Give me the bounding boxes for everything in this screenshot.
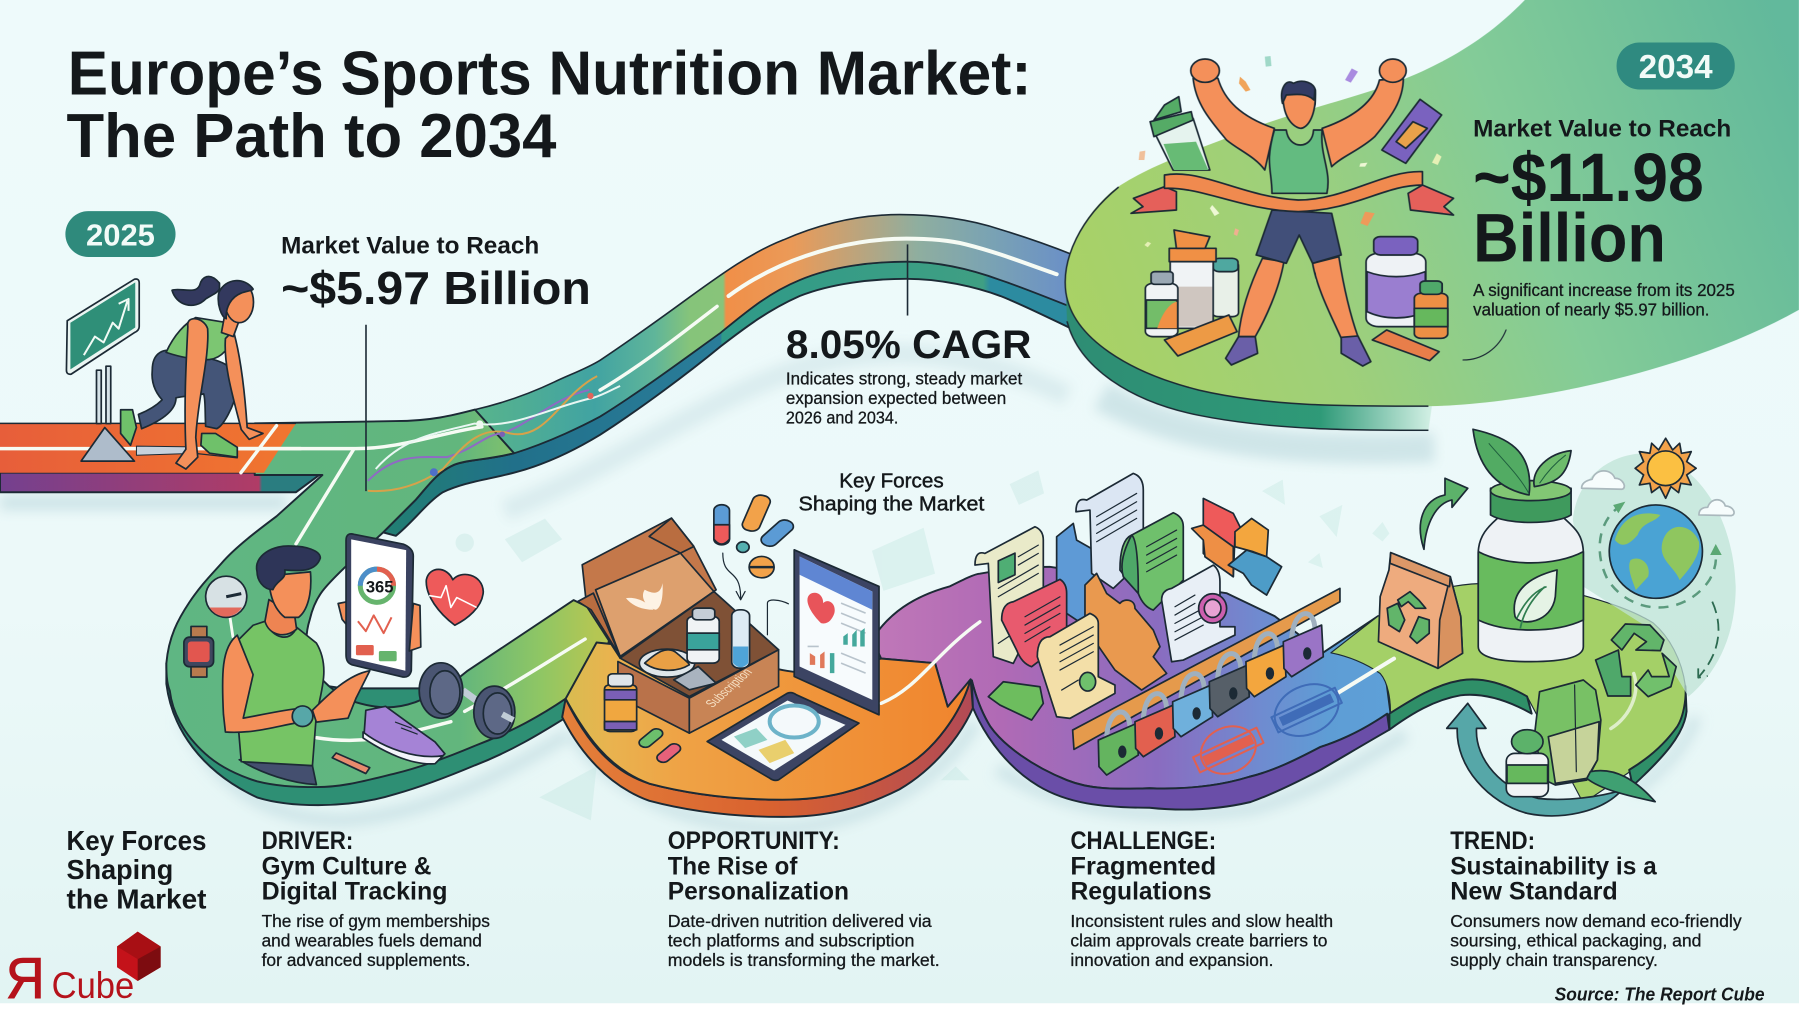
surface: driver loop: [166, 410, 614, 787]
smart watch: [184, 626, 214, 677]
running shoe: [363, 706, 445, 764]
callout: CAGR: Indicates strong, steady market: [786, 368, 1022, 388]
icon: victorious athlete with supplements: [1131, 56, 1506, 366]
badge: 2034: [1617, 42, 1735, 90]
small green jar: [1506, 730, 1548, 797]
icon: growth sign: [66, 279, 139, 424]
head: [1283, 90, 1315, 128]
sun: [1635, 438, 1696, 498]
finish ribbon: [1131, 172, 1453, 215]
red stamp: [1187, 715, 1270, 785]
arms raised: [1193, 78, 1274, 170]
callout: CAGR: 8.05% CAGR: [786, 322, 1031, 367]
text block: challenge: [1070, 827, 1333, 970]
heading: key forces: the Market: [67, 884, 207, 915]
confetti: [1139, 56, 1442, 247]
certificate document: [975, 527, 1043, 663]
edge: starting straight top: [0, 422, 296, 424]
open lid: [582, 518, 716, 658]
green document: [1120, 513, 1183, 610]
heart: [426, 569, 483, 625]
heading: key forces: Key Forces: [67, 825, 207, 856]
text block: opportunity: [668, 827, 940, 970]
rim: trend inner: [1389, 679, 1532, 730]
top-right jigsaw cluster: [1192, 498, 1282, 595]
surface: opportunity section: [566, 643, 971, 800]
panel: 2034 destination platform: [1065, 0, 1799, 430]
surface: upper ribbon: [475, 215, 1073, 453]
pills: [637, 494, 797, 764]
callout: 2034 market value: Market Value to Reach: [1473, 116, 1731, 143]
text block: driver: The rise of gym memberships: [262, 911, 490, 931]
source credit: Source: The Report Cube: [1555, 983, 1765, 1004]
phone reading: 365: [366, 577, 394, 596]
text block: challenge: innovation and expansion.: [1070, 950, 1274, 970]
blue-grey document: [1076, 473, 1143, 588]
recycling symbol: [1596, 624, 1676, 697]
callout: 2025 market value: ~$5.97 Billion: [281, 262, 591, 314]
text block: opportunity: Personalization: [668, 878, 849, 906]
text block: driver: Gym Culture &: [262, 852, 431, 880]
dumbbell: [419, 663, 515, 738]
green halo: [1573, 453, 1736, 697]
heading: key forces: Shaping: [67, 854, 173, 885]
lane markings: [0, 239, 1636, 740]
tank top: [1269, 130, 1328, 193]
callout: 2034 market value: ~$11.98: [1473, 139, 1704, 216]
shorts: [1256, 210, 1341, 263]
earth: [1609, 505, 1702, 598]
legs: [1239, 258, 1284, 337]
shaker bottle: [1150, 97, 1210, 170]
heading: key forces centre: Key Forces: [839, 470, 944, 493]
text block: opportunity: models is transforming the market.: [668, 950, 940, 970]
text block: trend: New Standard: [1450, 878, 1618, 906]
leaf: [1587, 771, 1655, 802]
platform rim edge: [1067, 321, 1428, 430]
recycled paper bag: [1378, 553, 1462, 668]
callout: CAGR: [786, 322, 1031, 427]
text block: driver: [262, 827, 490, 970]
badge: 2034: 2034: [1639, 49, 1713, 86]
rim: straight start: [0, 473, 322, 492]
left supplement group: [1145, 230, 1239, 356]
rim: driver loop: [166, 663, 570, 805]
sealed document: [1162, 565, 1235, 662]
callout: 2034 market value: valuation of nearly $5.97 billion.: [1473, 300, 1710, 320]
orbit arrows: [1600, 505, 1716, 607]
text block: challenge: Regulations: [1070, 878, 1212, 906]
bottle in box: [687, 616, 719, 663]
brand leaf: [626, 583, 663, 610]
badge: 2025: [65, 211, 176, 257]
platform surface edge: [1065, 187, 1428, 406]
callout: 2025 market value: [281, 233, 591, 314]
rim: upper ribbon: [383, 262, 1073, 536]
surface: starting straight: [0, 423, 296, 473]
callout: 2034 market value: [1473, 116, 1735, 320]
icon: sustainability jar, earth and recycling: [1378, 429, 1736, 816]
badge: 2025: 2025: [86, 218, 155, 253]
platform surface: [1065, 0, 1799, 406]
marker line CAGR: [907, 244, 909, 316]
callout: CAGR: expansion expected between: [786, 388, 1006, 408]
wood bar: [1073, 588, 1340, 749]
text block: opportunity: OPPORTUNITY:: [668, 827, 840, 855]
padlocks: [1098, 614, 1323, 775]
text block: trend: supply chain transparency.: [1450, 950, 1658, 970]
heading: key forces centre: [799, 470, 985, 516]
callout: 2034 market value: A significant increase from its 2025: [1473, 280, 1735, 300]
marker line 2025: [365, 325, 367, 491]
text block: driver: and wearables fuels demand: [262, 931, 482, 951]
track shadows: [0, 354, 1696, 829]
blue-green circular arrow: [1447, 703, 1622, 816]
callout: 2034 market value: Billion: [1473, 200, 1666, 277]
logo: RCube: Я: [6, 947, 45, 1011]
text block: trend: Consumers now demand eco-friendly: [1450, 911, 1742, 931]
text block: opportunity: Date-driven nutrition delivered via: [668, 911, 932, 931]
jar leaves: [1473, 429, 1571, 495]
logo: RCube: Cube: [52, 965, 134, 1006]
icon: regulation documents, puzzle pieces, locks and stamps: [975, 473, 1348, 785]
small arc accent: [1463, 330, 1506, 360]
callout: CAGR: 2026 and 2034.: [786, 407, 898, 427]
icon: subscription box and tablets: [578, 494, 879, 780]
text block: trend: TREND:: [1450, 827, 1535, 855]
text block: opportunity: The Rise of: [668, 852, 798, 880]
test tube: [732, 610, 750, 668]
process arrows: [723, 553, 788, 635]
blue back puzzle: [1057, 523, 1100, 627]
title: The Path to 2034: [67, 102, 557, 171]
gauge: [206, 576, 247, 617]
icon: runner in starting position: [81, 276, 263, 469]
cream document: [1037, 613, 1115, 718]
green jigsaw piece: [988, 682, 1043, 720]
supplement bar: [332, 753, 370, 774]
text block: challenge: claim approvals create barriers to: [1070, 931, 1327, 951]
blue stamp: [1265, 674, 1348, 747]
text block: trend: [1450, 827, 1742, 970]
surface: trend section: [1331, 583, 1686, 803]
curved growth arrow: [1420, 478, 1468, 549]
text block: challenge: Inconsistent rules and slow health: [1070, 911, 1333, 931]
surface: challenge section: [872, 567, 1391, 789]
white footer strip: [0, 1003, 1799, 1020]
rim: trend outer: [1629, 686, 1687, 786]
text block: driver: Digital Tracking: [262, 878, 447, 906]
title: [67, 40, 1031, 171]
red document: [1002, 579, 1067, 667]
rim: challenge section: [972, 680, 1389, 810]
refill pack: [1534, 680, 1601, 785]
callout: 2025 market value: Market Value to Reach: [281, 233, 539, 260]
box label: Subscription: [702, 666, 756, 710]
orange puzzle: [1085, 573, 1167, 690]
box faces: [618, 661, 689, 733]
main supplement jar: [1478, 481, 1583, 662]
text block: driver: DRIVER:: [262, 827, 353, 855]
purple jar: [605, 674, 637, 731]
clouds: [1582, 471, 1624, 489]
decorative faint shapes: [456, 470, 1389, 820]
text block: opportunity: tech platforms and subscription: [668, 931, 914, 951]
growth squiggle lines on track: [368, 376, 620, 491]
upright tablet: [794, 550, 879, 715]
logo: RCube: [6, 932, 161, 1011]
protein bar wrapper: [1382, 99, 1442, 163]
icon: man with fitness phone: [184, 534, 515, 785]
panel: winding track: [0, 215, 1687, 817]
text block: trend: soursing, ethical packaging, and: [1450, 931, 1701, 951]
right supplement group: [1366, 237, 1448, 361]
shoes: [1226, 337, 1258, 365]
text block: challenge: Fragmented: [1070, 852, 1216, 880]
text block: challenge: CHALLENGE:: [1070, 827, 1216, 855]
flat tablet: [707, 693, 859, 780]
heading: key forces: [67, 825, 207, 915]
powder bowl: [639, 649, 695, 677]
heading: key forces centre: Shaping the Market: [799, 493, 985, 516]
text block: trend: Sustainability is a: [1450, 852, 1658, 880]
text block: driver: for advanced supplements.: [262, 950, 470, 970]
platform rim: [1066, 293, 1432, 430]
rim: opportunity section: [562, 679, 973, 817]
title: Europe’s Sports Nutrition Market:: [68, 40, 1031, 109]
